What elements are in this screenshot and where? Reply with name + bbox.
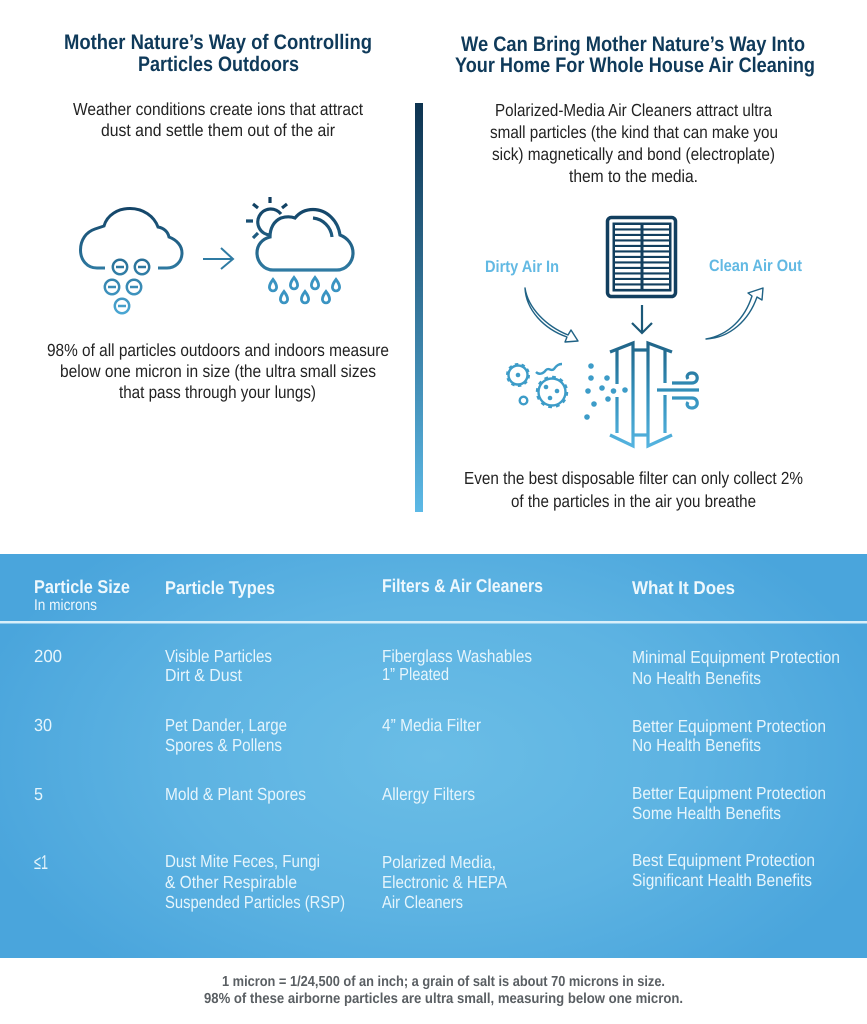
table header: What It Does xyxy=(632,577,735,598)
row: 1 micron or less: Significant Health Benefits xyxy=(632,870,812,890)
row: 1 micron or less: Best Equipment Protection xyxy=(632,850,815,870)
row: 30 microns: No Health Benefits xyxy=(632,735,761,755)
right lower text: of the particles in the air you breathe xyxy=(511,491,756,511)
row: 200 microns: Minimal Equipment Protection xyxy=(632,647,840,667)
arrow: filter down to media xyxy=(632,305,652,333)
table header: Particle Size xyxy=(34,576,130,597)
table header: Filters & Air Cleaners xyxy=(382,575,543,596)
left lower text: below one micron in size (the ultra small sizes xyxy=(60,361,376,381)
row: 200 microns: No Health Benefits xyxy=(632,668,761,688)
row: 1 micron or less: & Other Respirable xyxy=(165,872,297,892)
row: 30 microns: Spores & Pollens xyxy=(165,735,282,755)
table header: In microns xyxy=(34,597,97,614)
row: 1 micron or less xyxy=(34,850,815,912)
left intro text: Weather conditions create ions that attract xyxy=(73,99,363,119)
footnote xyxy=(204,974,683,1007)
arrow xyxy=(203,248,233,269)
row: 1 micron or less: Dust Mite Feces, Fungi xyxy=(165,851,320,871)
row: 200 microns xyxy=(34,646,840,688)
row: 30 microns: Pet Dander, Large xyxy=(165,715,287,735)
row: 30 microns xyxy=(34,715,826,755)
row: 5 microns: 5 xyxy=(34,784,43,804)
right column xyxy=(455,33,815,511)
row: 30 microns: 4” Media Filter xyxy=(382,715,481,735)
right intro text: small particles (the kind that can make you xyxy=(490,122,778,142)
row: 200 microns: 1” Pleated xyxy=(382,664,449,684)
left heading xyxy=(64,31,372,76)
right intro text: them to the media. xyxy=(569,166,698,186)
row: 5 microns: Allergy Filters xyxy=(382,784,475,804)
arrow: dirty air curve xyxy=(525,288,578,342)
row: 200 microns: Dirt & Dust xyxy=(165,665,242,685)
panel: particle size table xyxy=(0,554,867,958)
left lower text xyxy=(47,340,389,402)
left column xyxy=(47,31,389,402)
right intro text: sick) magnetically and bond (electroplate) xyxy=(492,144,775,164)
label: dirty air in: Dirty Air In xyxy=(485,258,559,276)
icon: filter grille xyxy=(608,218,676,296)
label: clean air out: Clean Air Out xyxy=(709,257,802,275)
row: 5 microns: Mold & Plant Spores xyxy=(165,784,306,804)
left intro text: dust and settle them out of the air xyxy=(101,120,335,140)
row: 1 micron or less: Electronic & HEPA xyxy=(382,872,507,892)
column divider xyxy=(415,103,423,512)
row: 30 microns: Better Equipment Protection xyxy=(632,716,826,736)
rain drops xyxy=(269,278,340,303)
right heading: We Can Bring Mother Nature’s Way Into xyxy=(461,33,805,56)
right intro text xyxy=(490,100,778,186)
table header xyxy=(34,575,735,614)
table header: Particle Types xyxy=(165,577,275,598)
icon: germs and particles xyxy=(507,363,628,420)
icon: sun and rain cloud xyxy=(246,197,353,303)
footnote: 98% of these airborne particles are ultra small, measuring below one micron. xyxy=(204,991,683,1007)
row: 1 micron or less: Polarized Media, xyxy=(382,852,496,872)
footnote: 1 micron = 1/24,500 of an inch; a grain of salt is about 70 microns in size. xyxy=(222,974,665,990)
left lower text: that pass through your lungs) xyxy=(119,382,316,402)
left heading: Particles Outdoors xyxy=(138,53,299,76)
right lower text: Even the best disposable filter can only collect 2% xyxy=(464,468,803,488)
right heading: Your Home For Whole House Air Cleaning xyxy=(455,54,815,77)
row: 5 microns: Better Equipment Protection xyxy=(632,783,826,803)
right lower text xyxy=(464,468,803,511)
row: 200 microns: 200 xyxy=(34,646,62,666)
row: 5 microns: Some Health Benefits xyxy=(632,803,781,823)
row: 1 micron or less: ≤1 xyxy=(34,852,48,874)
left lower text: 98% of all particles outdoors and indoors measure xyxy=(47,340,389,360)
left intro text xyxy=(73,99,363,140)
icon: pleated media filter with air flow xyxy=(610,343,699,446)
left heading: Mother Nature’s Way of Controlling xyxy=(64,31,372,54)
arrow: clean air curve xyxy=(706,288,763,339)
right heading xyxy=(455,33,815,77)
row: 5 microns xyxy=(34,783,826,823)
row: 200 microns: Fiberglass Washables xyxy=(382,646,532,666)
right intro text: Polarized-Media Air Cleaners attract ultra xyxy=(495,100,772,120)
icon: cloud with negative ions xyxy=(80,208,182,313)
row: 30 microns: 30 xyxy=(34,715,52,735)
row: 200 microns: Visible Particles xyxy=(165,646,272,666)
row: 1 micron or less: Suspended Particles (RSP) xyxy=(165,892,345,912)
row: 1 micron or less: Air Cleaners xyxy=(382,892,463,912)
